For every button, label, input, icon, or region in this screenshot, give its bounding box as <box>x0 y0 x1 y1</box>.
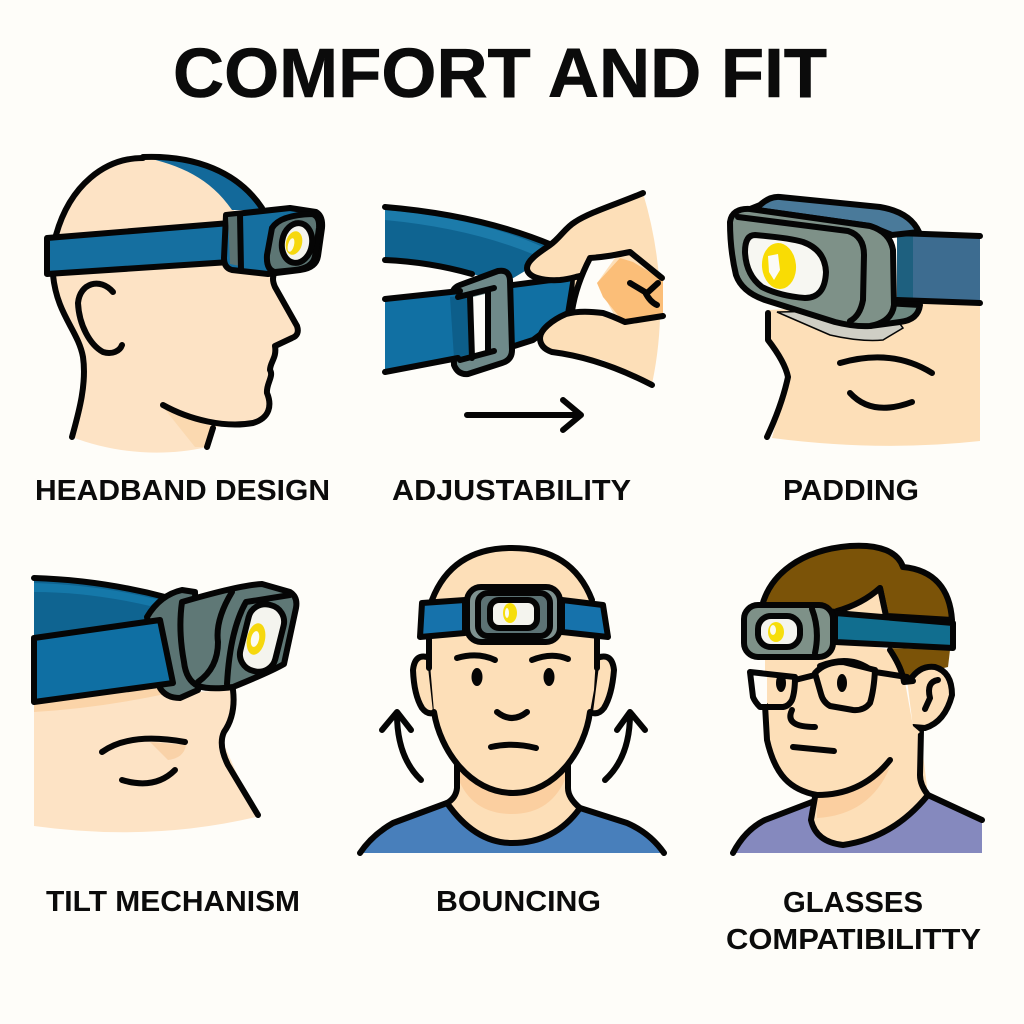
left ear <box>413 656 436 713</box>
eye <box>122 770 175 783</box>
hand skin <box>527 193 660 384</box>
label: padding: PADDING <box>783 475 919 507</box>
head outline <box>53 158 143 437</box>
label: adjustability: ADJUSTABILITY <box>392 475 631 507</box>
face outline <box>767 313 788 437</box>
right band <box>562 600 608 637</box>
label: tilt mechanism: TILT MECHANISM <box>46 886 300 918</box>
right eyebrow <box>532 656 568 660</box>
palm gap <box>573 258 618 322</box>
top strap outer edge <box>143 157 262 208</box>
lamp seam <box>738 217 864 321</box>
label line one: GLASSES <box>783 887 923 919</box>
strap edges <box>385 207 552 274</box>
neck shade <box>458 760 568 814</box>
lamp lower back <box>870 303 920 326</box>
upper strap <box>34 578 165 638</box>
lower finger outline <box>540 312 663 385</box>
right frame <box>815 662 875 710</box>
upper strap highlight <box>34 583 160 606</box>
lamp inner <box>478 593 550 636</box>
headband shade <box>897 236 913 300</box>
curled finger <box>597 258 663 320</box>
shirt <box>360 803 664 853</box>
ear fold <box>925 680 938 709</box>
lens <box>758 616 800 647</box>
side strap <box>47 223 230 274</box>
shirt <box>733 795 982 853</box>
label: headband design: HEADBAND DESIGN <box>35 475 330 507</box>
buckle window <box>473 294 485 356</box>
eyebrow <box>840 357 932 373</box>
panel: bouncing <box>360 548 664 853</box>
nose <box>790 710 815 727</box>
lower strap right <box>505 277 574 349</box>
strap shade <box>450 295 470 358</box>
ear outline <box>910 667 952 728</box>
right arrow <box>605 712 645 780</box>
left arrow <box>382 712 421 780</box>
left lens gap <box>752 672 767 706</box>
right eye <box>837 674 847 692</box>
bulb <box>244 621 268 657</box>
lower strap <box>34 620 173 702</box>
upper strap <box>385 207 552 280</box>
bulb <box>283 229 305 257</box>
eye <box>850 393 912 408</box>
label: glasses compatibility <box>726 887 981 956</box>
lamp front panel <box>227 595 290 684</box>
bulb <box>760 242 798 290</box>
mouth <box>491 745 536 748</box>
left eyebrow <box>457 655 495 660</box>
neck shade <box>817 767 890 818</box>
bulb centre <box>249 630 261 648</box>
bulb highlight <box>505 608 509 618</box>
panel: headband design <box>47 157 322 453</box>
title: COMFORT AND FIT <box>173 34 827 112</box>
headband <box>835 613 953 648</box>
shirt outline <box>360 803 664 853</box>
shirt outline <box>733 795 982 853</box>
buckle frame <box>452 271 512 374</box>
lamp back <box>750 197 919 235</box>
hand outline <box>527 193 662 311</box>
bulb <box>768 622 784 642</box>
lamp clip <box>228 216 240 266</box>
bridge and temple <box>795 672 907 680</box>
top strap <box>143 157 262 210</box>
left eye <box>472 668 482 686</box>
lower strap edges <box>385 291 460 372</box>
eyebrow <box>102 739 185 752</box>
hair <box>762 546 952 620</box>
ear fill <box>907 667 952 728</box>
lens <box>279 221 315 265</box>
bulb highlight <box>770 625 776 635</box>
lamp front <box>267 214 319 272</box>
finger creases <box>630 283 658 305</box>
upper strap edge <box>34 578 165 597</box>
head <box>428 548 597 793</box>
lamp outer <box>467 587 560 642</box>
head outline <box>429 548 597 793</box>
glasses <box>750 662 907 710</box>
panel: padding <box>730 197 980 446</box>
lamp seam <box>812 609 817 653</box>
bulb highlight <box>768 254 780 280</box>
lamp body <box>730 209 894 326</box>
padding <box>777 310 903 340</box>
label line two: COMPATIBILITTY <box>726 924 981 956</box>
lens <box>236 601 288 675</box>
left band <box>420 600 465 637</box>
right eye <box>544 668 554 686</box>
clip line <box>240 214 241 270</box>
bulb <box>503 603 517 623</box>
panel: adjustability <box>385 193 663 430</box>
nose <box>497 712 527 718</box>
lower strap left <box>385 292 470 372</box>
lens <box>745 235 826 298</box>
ear <box>78 284 122 353</box>
lower hair <box>890 648 950 680</box>
jaw line <box>765 705 890 795</box>
lamp clip <box>147 590 198 698</box>
panel: glasses compatibility <box>733 546 982 853</box>
skin <box>768 300 980 446</box>
lamp housing <box>224 208 322 274</box>
collar line <box>811 730 928 845</box>
face profile <box>163 272 298 447</box>
strap highlight <box>385 210 545 255</box>
face outline <box>222 690 258 815</box>
headband edges <box>897 233 980 303</box>
head skin <box>52 158 298 453</box>
face <box>765 640 920 795</box>
buckle bars <box>458 288 494 360</box>
lamp body <box>180 584 296 688</box>
right ear <box>590 656 614 713</box>
neck and collar lines <box>447 763 580 843</box>
lens <box>490 600 537 628</box>
neck <box>812 730 928 845</box>
hair edge below band <box>890 650 913 682</box>
label: bouncing: BOUNCING <box>436 886 601 918</box>
forehead gap line <box>837 588 886 616</box>
left eye <box>776 674 786 692</box>
skin shadow <box>34 688 170 712</box>
forehead gap <box>837 590 886 618</box>
lamp body <box>744 605 833 657</box>
left frame <box>750 672 795 707</box>
lamp seam <box>198 592 232 682</box>
headband <box>897 233 980 303</box>
pull arrow <box>467 400 581 430</box>
skin <box>34 690 256 832</box>
bulb highlight <box>286 237 296 253</box>
neck <box>447 750 580 843</box>
mouth <box>793 747 834 751</box>
neck shade <box>163 407 213 447</box>
eyebrow <box>820 661 868 668</box>
panel: tilt mechanism <box>34 578 296 832</box>
nose shade <box>150 742 186 760</box>
